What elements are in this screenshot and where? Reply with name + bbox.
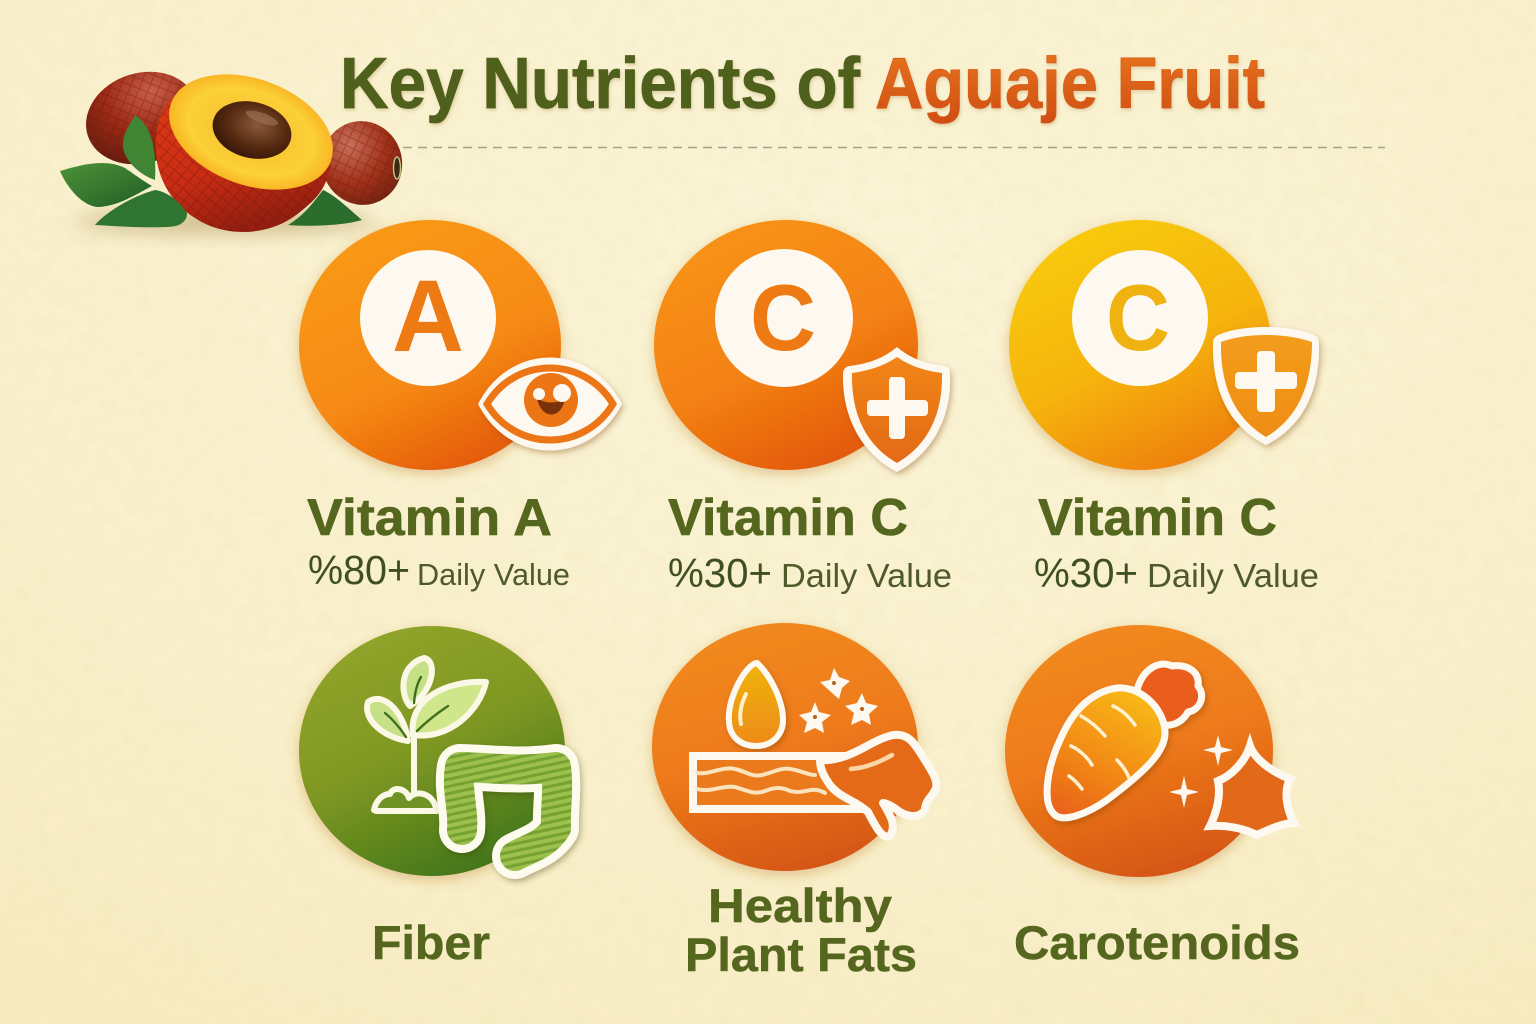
daily value: %30+ (668, 550, 772, 596)
icon: fat tissue band (693, 756, 863, 809)
circle (1005, 625, 1273, 877)
daily value (1034, 550, 1319, 596)
daily value: Daily Value (1147, 557, 1319, 594)
daily value: Daily Value (781, 557, 952, 594)
card: vitamin C orange (654, 220, 952, 596)
icon: oil drop (729, 663, 783, 746)
title divider (403, 146, 1385, 148)
card: fiber (299, 626, 565, 969)
letter badge: C (1106, 265, 1170, 370)
label: Carotenoids (1014, 916, 1300, 969)
title: Key Nutrients of (340, 44, 861, 124)
back left fruit (74, 58, 210, 178)
icon: intestine (459, 767, 557, 856)
illustration: aguaje fruit (60, 53, 412, 234)
label: Vitamin C (1038, 489, 1277, 547)
front leaves (95, 115, 187, 227)
daily value: %30+ (1034, 550, 1138, 596)
daily value (668, 550, 952, 596)
card: carotenoids (1005, 625, 1300, 969)
label: Vitamin A (307, 489, 552, 547)
circle (652, 623, 918, 871)
letter badge: C (750, 265, 816, 370)
label: Fiber (372, 916, 490, 969)
cut fruit half (153, 53, 349, 232)
icon: fat lump (820, 735, 936, 837)
back leaves (60, 163, 362, 226)
circle (654, 220, 918, 470)
title (340, 44, 1265, 124)
letter badge (715, 249, 853, 387)
circle (299, 626, 565, 876)
icon: shield (843, 347, 950, 472)
label: Plant Fats (685, 928, 917, 981)
icon: sprout (367, 658, 486, 811)
daily value: Daily Value (417, 557, 570, 592)
circle (299, 220, 561, 470)
letter badge: A (392, 259, 464, 373)
card: vitamin A (299, 220, 622, 593)
back right fruit (312, 112, 412, 214)
icon: stars (799, 668, 878, 733)
letter badge (360, 250, 496, 386)
title: Aguaje Fruit (875, 44, 1265, 124)
icon: burst (1210, 746, 1294, 835)
label: Vitamin C (668, 489, 908, 547)
card: healthy plant fats (652, 623, 936, 981)
daily value: %80+ (308, 547, 410, 593)
icon: eye (478, 358, 622, 450)
circle (1009, 220, 1271, 470)
daily value (308, 547, 570, 593)
letter badge (1072, 250, 1208, 386)
label: Healthy (708, 879, 892, 932)
icon: sparkles (1169, 735, 1233, 808)
icon: shield (1213, 327, 1319, 445)
card: vitamin C yellow (1009, 220, 1319, 596)
label (685, 879, 917, 981)
icon: carrot (1047, 664, 1202, 818)
